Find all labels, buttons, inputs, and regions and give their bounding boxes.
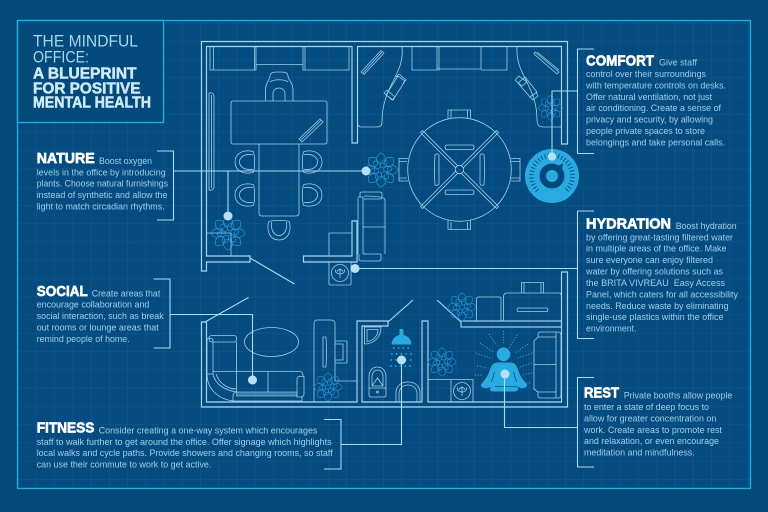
oval rug <box>244 328 298 356</box>
walls: upper rooms <box>202 42 568 271</box>
text: hydration: single-use plastics within the office <box>586 312 724 322</box>
text: fitness: local walks and cycle paths. Provide showers and changing rooms, so staff <box>37 448 333 458</box>
text: fitness <box>37 421 333 470</box>
rest plant <box>428 348 456 376</box>
meditation rays <box>475 331 532 383</box>
text: hydration: needs. Reduce waste by eliminating <box>586 301 728 311</box>
text: fitness: staff to walk further to get around the office. Offer signage which highlights <box>37 437 332 447</box>
text: nature: levels in the office by introducing <box>37 168 166 178</box>
pen left <box>361 50 384 74</box>
text: hydration: HYDRATION <box>586 217 671 233</box>
text: hydration <box>585 217 738 334</box>
rest socket glyph <box>457 387 467 396</box>
text: fitness: FITNESS <box>37 421 95 437</box>
L-shaped sofa <box>207 336 304 401</box>
text: social: SOCIAL <box>37 284 88 300</box>
bed slot <box>517 308 548 312</box>
text: hydration: environment. <box>586 324 636 334</box>
nature plant <box>364 153 398 187</box>
text: rest: Private booths allow people <box>624 391 732 401</box>
right curve partition <box>517 46 561 127</box>
text: rest: and relaxation, or even encourage <box>584 436 719 446</box>
text: social: social interaction, such as break <box>37 311 164 321</box>
title panel <box>18 20 164 122</box>
hydration leader <box>355 211 594 338</box>
text: social: Create areas that <box>92 288 161 298</box>
rest sofa <box>534 332 561 398</box>
plant box <box>206 233 231 256</box>
text: social: out rooms or lounge areas that <box>37 322 159 332</box>
table hub <box>455 165 464 174</box>
icon: shower <box>390 329 414 366</box>
desk chair <box>335 341 347 363</box>
lower lounge furniture <box>207 282 561 402</box>
small plant <box>538 96 563 120</box>
side sofa <box>358 192 385 261</box>
icon: meditating person <box>475 331 532 392</box>
floor plan <box>202 42 568 407</box>
text: comfort: Offer natural ventilation, not just <box>586 92 712 102</box>
upper right plant <box>448 293 476 321</box>
left curve partition <box>358 46 402 127</box>
text: rest: to enter a state of deep focus to <box>584 402 709 412</box>
text: nature: plants. Choose natural furnishings <box>37 179 168 189</box>
social leader <box>154 279 252 380</box>
text: hydration: sure everyone can enjoy filtered <box>586 255 713 265</box>
long sofa <box>412 46 507 70</box>
text: fitness: Consider creating a one-way system which encourages <box>99 426 318 436</box>
wall shelf <box>209 93 214 190</box>
text: nature <box>37 151 168 212</box>
text: comfort: people private spaces to store <box>586 126 705 136</box>
text: nature: NATURE <box>37 151 95 167</box>
text: comfort: Give staff <box>659 58 697 68</box>
text: comfort <box>585 54 726 147</box>
shower water dots <box>390 348 414 366</box>
text: rest: allow for greater concentration on <box>584 414 716 424</box>
bed and cabinet <box>504 282 561 321</box>
text: social: remind people of home. <box>37 334 130 344</box>
walls: lower rooms <box>202 272 568 407</box>
shower corner <box>364 327 381 344</box>
desk <box>231 101 327 216</box>
title bold <box>33 66 151 112</box>
rest leader <box>504 374 594 467</box>
desk plant <box>314 373 342 401</box>
left lamp chair <box>384 74 406 100</box>
table seats <box>434 145 484 194</box>
pen right <box>534 52 559 74</box>
desk chair <box>266 72 293 101</box>
text: nature: instead of synthetic and allow the <box>37 190 167 200</box>
toilet flush <box>376 391 378 393</box>
title bold: FOR POSITIVE <box>33 80 140 97</box>
title panel: OFFICE: <box>33 49 89 67</box>
corner plant <box>211 216 245 250</box>
text: hydration: in multiple areas of the office. Make <box>586 244 726 254</box>
text: hydration: by offering great-tasting filtered water <box>586 232 733 242</box>
work desk <box>314 320 357 402</box>
text: hydration: the BRITA VIVREAU Easy Access <box>586 278 725 288</box>
title bold: A BLUEPRINT <box>33 66 137 83</box>
walls: central wall stub <box>304 221 357 262</box>
text: rest: meditation and mindfulness. <box>584 448 695 458</box>
comfort leader <box>552 49 594 156</box>
rest socket ring <box>454 382 470 400</box>
meeting chairs <box>235 151 254 173</box>
text: rest: work. Create areas to promote rest <box>583 425 722 435</box>
text: hydration: Panel, which caters for all accessibility <box>586 289 738 299</box>
right upper lounge furniture <box>358 46 563 261</box>
leader lines and markers <box>154 49 594 469</box>
round table <box>408 118 511 221</box>
table chairs <box>399 110 520 230</box>
title light: THE MINDFUL <box>33 33 138 51</box>
text: nature: Boost oxygen <box>99 156 152 166</box>
text: comfort: privacy and security, by allowing <box>586 115 713 125</box>
toilet <box>369 367 386 397</box>
text: comfort: with temperature controls on desks. <box>585 80 726 90</box>
wall: upper right room shelf <box>461 321 562 327</box>
rest boxes <box>428 380 473 402</box>
right lamp chair <box>515 76 538 100</box>
storage box <box>476 297 501 321</box>
table crossed supports <box>420 130 498 208</box>
text: comfort: belongings and take personal calls. <box>586 137 725 147</box>
text: hydration: water by offering solutions such as <box>585 267 723 277</box>
left office furniture <box>206 46 352 285</box>
sofa back strip <box>236 392 297 396</box>
doors <box>205 258 461 322</box>
text: social <box>37 284 164 344</box>
water tap socket <box>329 262 351 285</box>
text: comfort: air conditioning. Create a sense of <box>586 103 721 113</box>
text: rest <box>583 386 732 458</box>
text: nature: light to match circadian rhythms. <box>37 202 165 212</box>
nature leader <box>157 151 366 220</box>
text: rest: REST <box>584 386 619 402</box>
icon: thermostat dial <box>525 149 579 203</box>
text: fitness: can use their commute to work to get active. <box>37 460 211 470</box>
text: comfort: COMFORT <box>586 54 654 70</box>
laptop <box>299 119 323 142</box>
text: comfort: control over their surroundings <box>586 69 706 79</box>
text: social: encourage collaboration and <box>37 300 149 310</box>
wall cabinets <box>210 46 349 70</box>
markers <box>362 166 370 176</box>
title bold: MENTAL HEALTH <box>33 95 151 112</box>
sink <box>396 382 420 402</box>
side box <box>329 233 352 256</box>
fitness leader <box>324 360 402 469</box>
text: hydration: Boost hydration <box>676 221 737 231</box>
